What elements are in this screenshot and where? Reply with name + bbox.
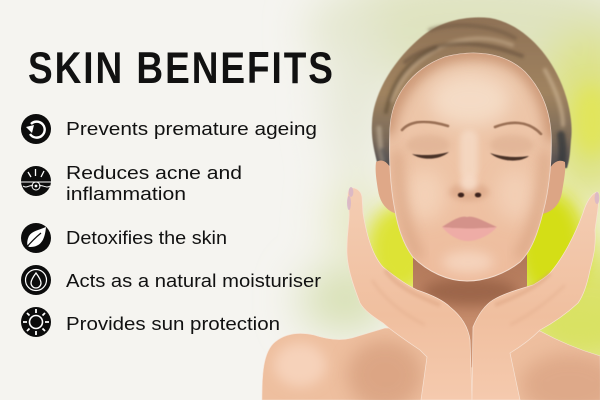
icon: leaf: [21, 223, 51, 253]
neck: [413, 254, 527, 368]
fingernails: [347, 187, 599, 210]
benefit: reduces acne: [21, 162, 242, 196]
title: SKIN BENEFITS: [28, 43, 333, 93]
face: [385, 52, 554, 281]
closed eyes: [412, 152, 529, 161]
hair: [372, 17, 572, 168]
woman portrait: [262, 17, 600, 400]
nose: [449, 130, 489, 201]
benefit label line 1: Reduces acne and: [66, 162, 242, 183]
icon: water drop: [21, 265, 51, 295]
right hand: [472, 192, 599, 400]
icon: rotating arrow: [21, 114, 51, 144]
shoulders and chest: [262, 328, 600, 400]
hair strands: [379, 25, 563, 165]
benefit: sun protection: [21, 307, 280, 337]
benefit label line 2: inflammation: [66, 183, 186, 204]
lips: [442, 217, 497, 241]
eyebrows: [402, 122, 541, 134]
hairline shadow: [385, 52, 554, 140]
icon: sun: [21, 307, 51, 337]
benefit: moisturiser: [21, 265, 321, 295]
eye sockets: [408, 135, 449, 154]
benefit label: Prevents premature ageing: [66, 118, 317, 139]
benefit label: Detoxifies the skin: [66, 227, 227, 248]
chin light: [442, 251, 494, 273]
benefit label: Provides sun protection: [66, 313, 280, 334]
left hand: [347, 188, 472, 400]
ears: [376, 160, 565, 214]
cheeks light: [405, 169, 445, 221]
benefit: prevents premature ageing: [21, 114, 317, 144]
icon: inflamed skin: [21, 166, 51, 196]
benefit: detoxifies: [21, 223, 227, 253]
forehead light: [430, 74, 510, 126]
benefit label: Acts as a natural moisturiser: [66, 270, 321, 291]
side shadows: [397, 150, 420, 258]
